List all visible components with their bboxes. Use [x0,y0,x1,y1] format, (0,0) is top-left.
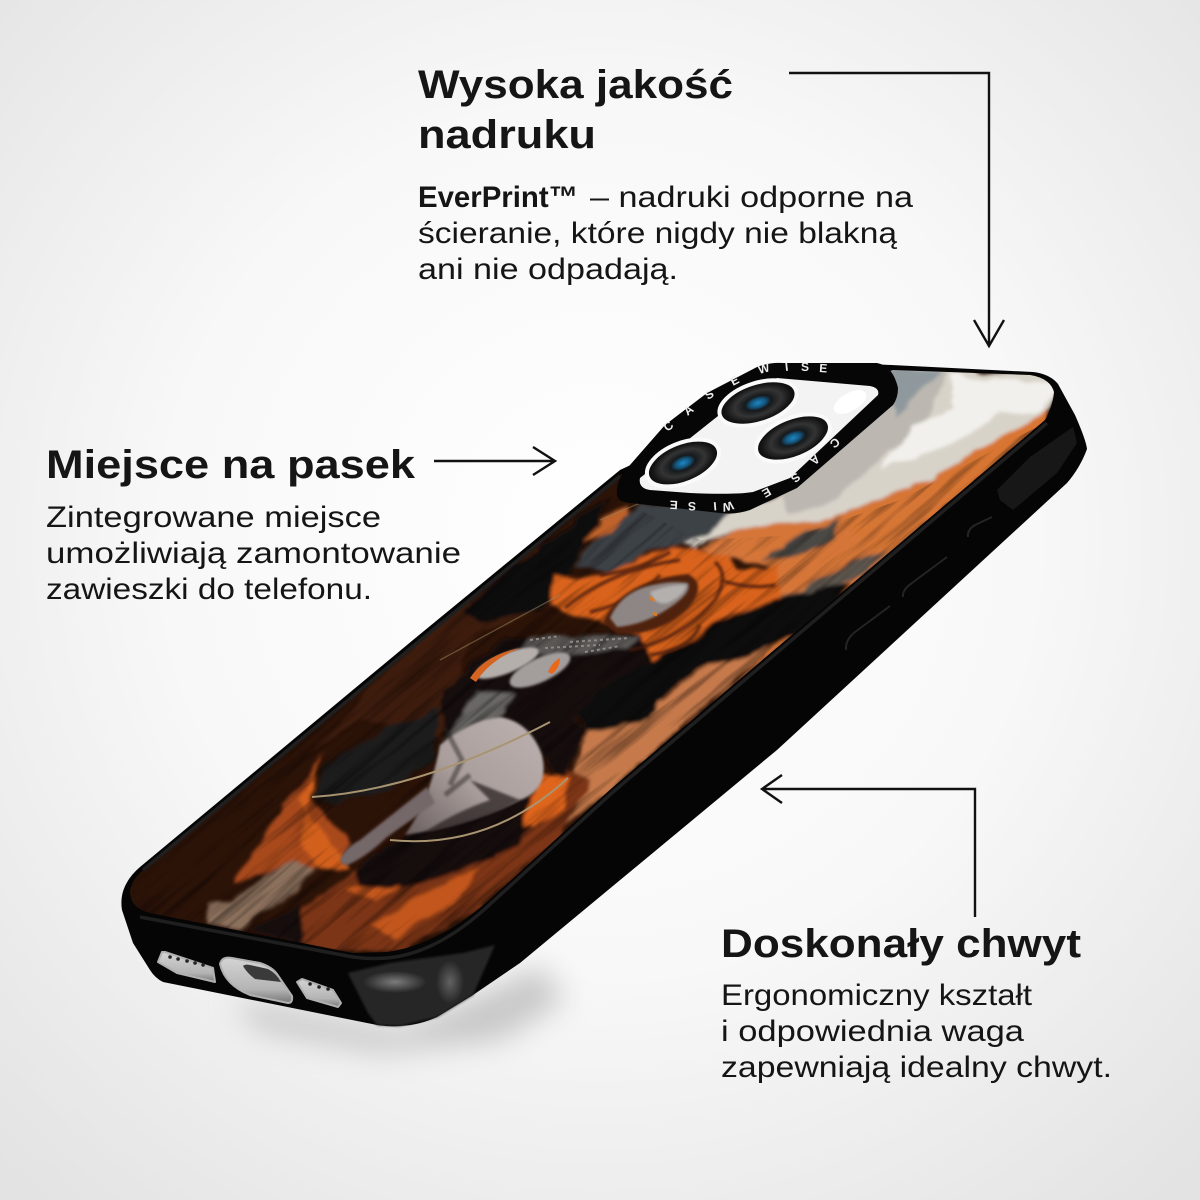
dark cloak [313,707,440,803]
lace specks [530,636,630,652]
heading: Wysoka jakość [418,63,733,107]
side buttons [846,517,992,650]
camera plate [640,378,878,494]
case body [121,363,1087,1026]
chest left [474,646,540,681]
orange upper streak [583,505,628,545]
left speaker [158,952,215,982]
description: zawieszki do telefonu. [46,573,372,606]
description: – nadruki odporne na [590,181,913,214]
chains [312,722,568,841]
description: Zintegrowane miejsce [46,501,381,534]
chest right [508,651,572,690]
outer rim [140,423,1047,958]
chest orange accent [548,658,560,674]
strap slot [997,427,1077,510]
lower leg [340,787,435,866]
USB opening [243,965,281,982]
waist lace [442,690,515,742]
cloud shade [780,368,948,515]
heading: Miejsce na pasek [46,443,416,487]
arrow: print quality [789,73,1004,346]
description: ścieranie, które nigdy nie blakną [418,217,897,250]
hair waves [565,552,775,655]
callout: grip [721,922,1112,1084]
orange land [682,408,1049,728]
torso dark [440,632,650,782]
chest orange rim [470,648,520,682]
phone case illustration [121,362,1087,1028]
callout: strap slot [46,443,461,606]
bump brand bottom: CASEWISE [669,435,843,515]
description: umożliwiają zamontowanie [46,537,461,570]
gloss base [348,945,495,1026]
orange left strokes [233,750,353,883]
right wing [573,585,853,730]
left brown [300,540,560,760]
printed artwork [130,370,1054,953]
lower streaks [345,870,480,940]
gloss highlight right [436,960,464,1004]
description: i odpowiednia waga [721,1015,1024,1048]
brush texture [140,427,1036,952]
blue grey cloud [890,370,942,418]
dark land patch [760,517,840,563]
heading: Doskonały chwyt [721,922,1081,966]
right wing grey feathers [742,549,888,616]
rock [207,860,313,930]
hair around face [603,574,698,634]
camera highlight [830,385,870,419]
right orange [522,772,572,825]
thigh veins [445,728,470,795]
bump brand top: CASEWISE [661,360,828,434]
bottom orange mass [297,770,590,952]
description: zapewniają idealny chwyt. [721,1051,1112,1084]
heading: nadruku [418,113,596,157]
hip [405,717,544,835]
eyes [650,597,657,615]
USB port [220,958,292,1003]
phone shadow [230,965,565,1052]
left wing [462,495,612,623]
lower right land [564,642,772,828]
face highlight [650,585,686,604]
art base [120,360,1060,960]
description: EverPrint™ [418,181,578,214]
face [610,582,689,627]
callout: print quality [418,63,913,286]
description: Ergonomiczny kształt [721,979,1033,1012]
camera lens right [749,405,837,471]
sky slate [575,505,735,570]
description: ani nie odpadają. [418,253,678,286]
arrow: strap slot [434,447,555,475]
thigh lace [425,780,520,832]
wing chain [440,503,640,660]
arrow: grip [762,775,975,917]
clouds [660,365,1060,550]
hair [550,547,782,660]
bottom corner gloss [348,945,495,1026]
camera lens left [640,430,726,496]
camera bump [617,363,898,514]
dark under rock [247,907,303,942]
lace highlights [520,635,640,655]
right speaker [297,979,341,1007]
camera lens top [714,372,802,434]
orange bright core [298,765,345,868]
gloss highlight left [363,971,427,993]
white cloud [880,375,1056,467]
lower cloak [353,795,535,892]
